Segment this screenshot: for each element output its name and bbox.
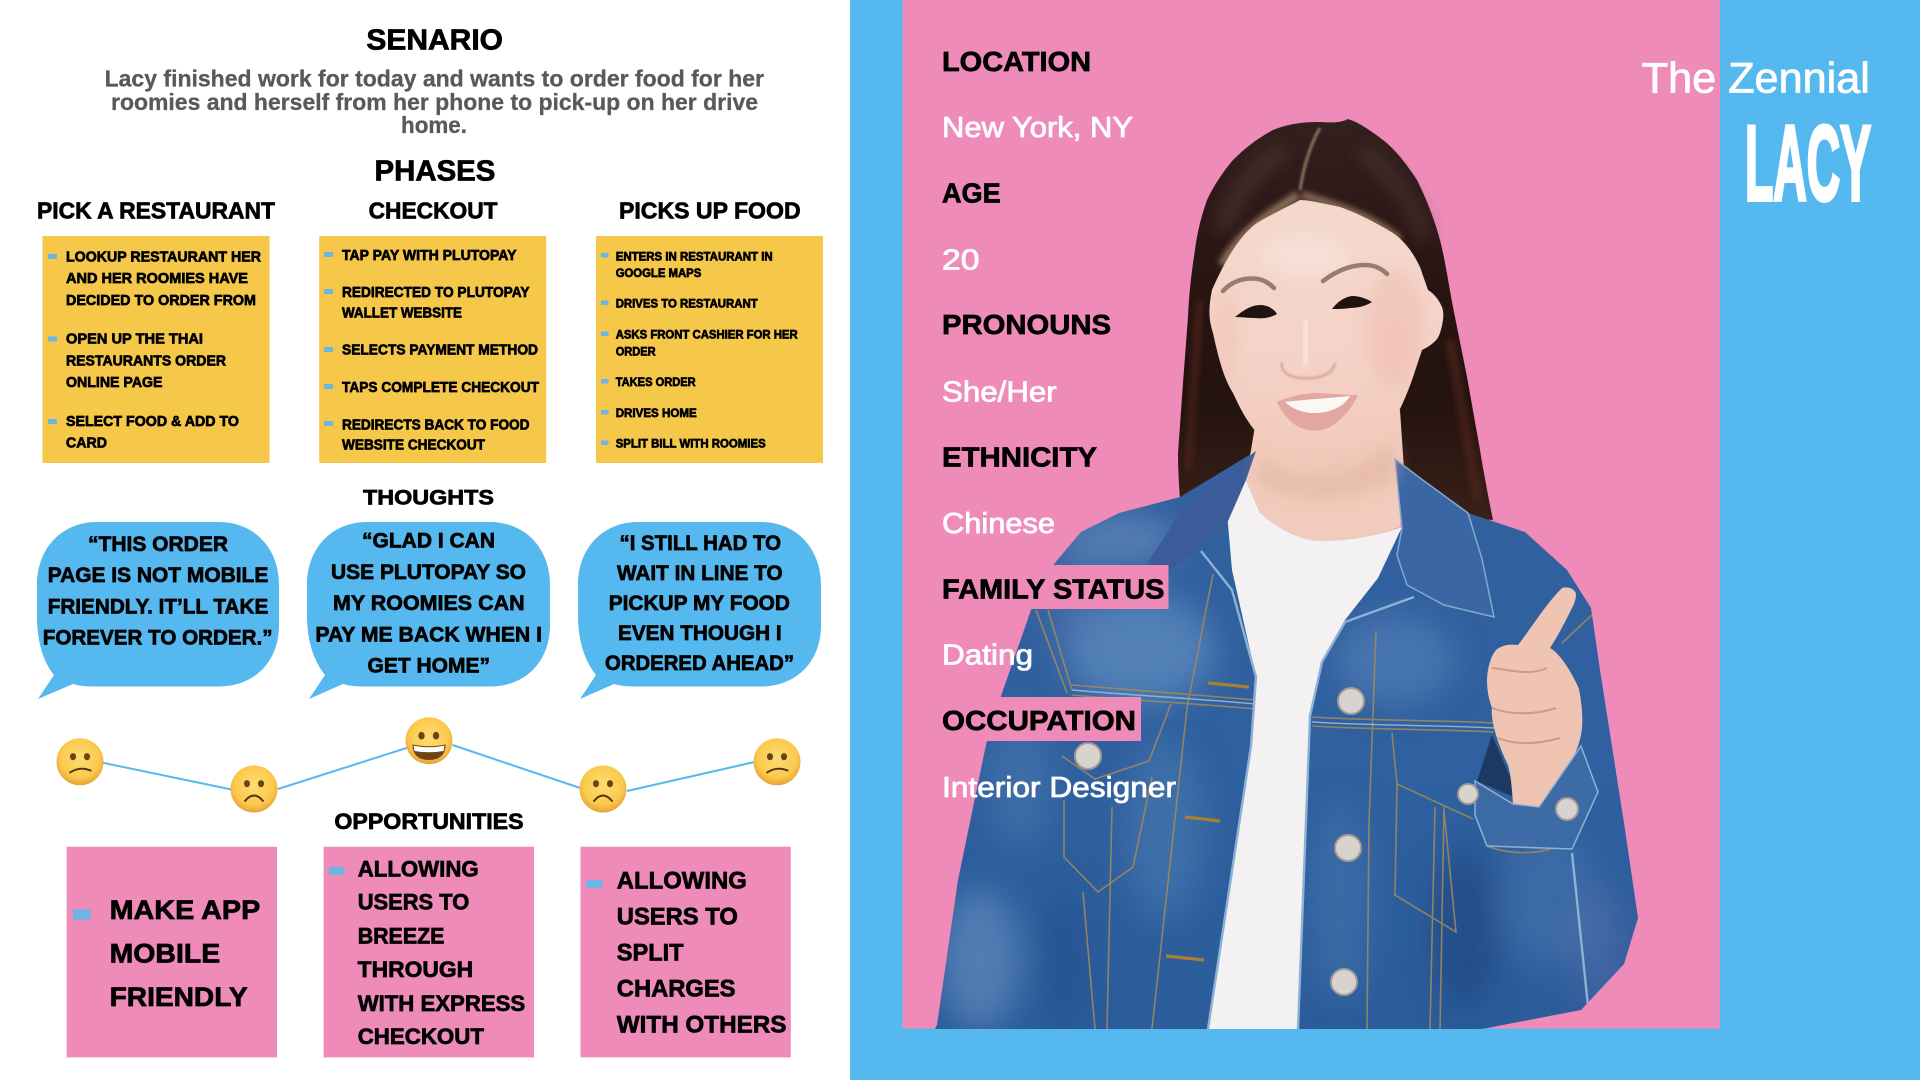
jacket body	[930, 440, 1650, 1040]
ethnicity value: Chinese	[942, 508, 1055, 540]
ethnicity label: ETHNICITY	[942, 441, 1097, 472]
pronouns label: PRONOUNS	[942, 309, 1111, 340]
panel: pick a restaurant steps: DECIDED TO ORDER FROM	[66, 292, 256, 309]
panel: checkout steps: TAP PAY WITH PLUTOPAY	[342, 248, 517, 264]
panel: opportunity 2: BREEZE	[358, 923, 444, 948]
scenario text	[105, 66, 764, 138]
panel: picks up food steps: ORDER	[616, 344, 656, 358]
icon: grinning face	[406, 717, 452, 764]
emotion journey line chart	[56, 717, 800, 812]
icon: confused face	[754, 738, 800, 785]
panel: opportunity 1: FRIENDLY	[110, 982, 248, 1012]
panel: opportunity 3: WITH OTHERS	[617, 1011, 786, 1038]
panel: opportunity 3: SPLIT	[617, 939, 684, 966]
pronouns value: She/Her	[942, 376, 1057, 408]
photo: woman in denim jacket giving thumbs up	[930, 119, 1650, 1040]
buttons	[1075, 688, 1578, 995]
panel: picks up food steps: ASKS FRONT CASHIER FOR HER	[616, 328, 798, 342]
icon: frowning face	[230, 766, 278, 812]
highlight: occupation	[942, 697, 1141, 741]
icon: frowning face	[580, 766, 626, 812]
family status value: Dating	[942, 639, 1033, 671]
panel: checkout steps: WALLET WEBSITE	[342, 306, 462, 322]
panel: opportunity 2	[324, 847, 534, 1057]
panel: opportunity 2: THROUGH	[358, 957, 473, 982]
scenario text: home.	[401, 112, 467, 138]
panel: opportunity 3: ALLOWING	[617, 867, 747, 894]
speech bubble 3: PICKUP MY FOOD	[609, 592, 790, 615]
face	[1209, 200, 1443, 498]
phase heading: checkout: CHECKOUT	[369, 197, 498, 223]
panel: picks up food steps: GOOGLE MAPS	[616, 266, 701, 280]
phases heading: PHASES	[374, 155, 495, 187]
panel: pick a restaurant steps: ONLINE PAGE	[66, 374, 162, 391]
speech bubble 2: PAY ME BACK WHEN I	[315, 622, 542, 646]
lips	[1277, 393, 1358, 431]
panel: picks up food steps: DRIVES HOME	[616, 406, 697, 420]
teeth	[1285, 396, 1350, 413]
panel: checkout steps: REDIRECTED TO PLUTOPAY	[342, 285, 530, 301]
speech bubble 3: “I STILL HAD TO	[620, 532, 781, 555]
left collar	[1147, 451, 1256, 572]
right panel: blue background	[850, 0, 1920, 1080]
panel: pick a restaurant steps: OPEN UP THE THAI	[66, 331, 203, 348]
location label: LOCATION	[942, 46, 1091, 77]
age value: 20	[942, 244, 980, 276]
panel: pick a restaurant steps: LOOKUP RESTAURANT HER	[66, 249, 261, 266]
jacket button loops	[1166, 683, 1249, 960]
panel: picks up food steps	[596, 236, 823, 463]
scenario heading: SENARIO	[366, 24, 503, 56]
panel: opportunity 2: ALLOWING	[358, 856, 479, 881]
speech bubble 1: FRIENDLY. IT’LL TAKE	[48, 594, 268, 618]
occupation value: Interior Designer	[942, 772, 1176, 804]
panel: picks up food steps: ENTERS IN RESTAURANT IN	[616, 249, 773, 263]
speech bubble 1: PAGE IS NOT MOBILE	[48, 563, 268, 587]
scenario text: Lacy finished work for today and wants to order food for her	[105, 66, 764, 92]
location value: New York, NY	[942, 112, 1133, 144]
persona type: The Zennial	[1642, 54, 1870, 102]
panel: checkout steps	[319, 236, 546, 463]
t-shirt	[1208, 480, 1402, 1029]
jacket stitching and seams	[1036, 574, 1595, 1029]
phase heading: pick a restaurant: PICK A RESTAURANT	[37, 197, 275, 223]
cuff inner shadow	[1477, 735, 1520, 800]
age label: AGE	[942, 177, 1001, 208]
panel: checkout steps: SELECTS PAYMENT METHOD	[342, 343, 538, 359]
scenario text: roomies and herself from her phone to pick-up on her drive	[111, 89, 758, 115]
speech bubble 2: USE PLUTOPAY SO	[331, 560, 526, 584]
persona details	[942, 46, 1176, 804]
eyes	[1235, 305, 1277, 318]
panel: opportunity 1: MOBILE	[110, 938, 220, 968]
panel: opportunity 2: USERS TO	[358, 890, 469, 915]
right panel: pink backdrop	[902, 0, 1720, 1028]
icon: confused face	[56, 738, 104, 785]
panel: opportunity 3: CHARGES	[617, 975, 736, 1002]
panel: opportunity 1: MAKE APP	[110, 895, 260, 925]
highlight: family status	[942, 565, 1168, 609]
nose	[1282, 320, 1335, 378]
eyebrows	[1223, 278, 1274, 291]
left panel background	[0, 0, 850, 1080]
panel: picks up food steps: TAKES ORDER	[616, 375, 696, 389]
occupation label: OCCUPATION	[942, 705, 1136, 736]
hand with thumb up	[1487, 587, 1582, 807]
right collar	[1395, 459, 1494, 617]
family status label: FAMILY STATUS	[942, 573, 1164, 604]
opportunities heading: OPPORTUNITIES	[334, 809, 524, 834]
speech bubble 3: WAIT IN LINE TO	[617, 562, 783, 585]
panel: opportunity 1	[67, 847, 277, 1057]
neck	[1246, 410, 1404, 541]
speech bubble 1: FOREVER TO ORDER.”	[43, 625, 273, 649]
speech bubble 3: EVEN THOUGH I	[618, 622, 782, 645]
speech bubble 1	[37, 522, 279, 699]
phase heading: picks up food: PICKS UP FOOD	[619, 197, 801, 223]
speech bubble 3	[578, 522, 821, 699]
panel: pick a restaurant steps: RESTAURANTS ORDER	[66, 352, 226, 369]
panel: pick a restaurant steps: AND HER ROOMIES HAVE	[66, 270, 248, 287]
speech bubble 2: “GLAD I CAN	[362, 529, 495, 553]
panel: checkout steps: TAPS COMPLETE CHECKOUT	[342, 380, 539, 396]
speech bubble 2	[307, 522, 550, 699]
panel: opportunity 2: WITH EXPRESS	[358, 991, 525, 1016]
panel: checkout steps: REDIRECTS BACK TO FOOD	[342, 417, 530, 433]
chin shadow on neck	[1256, 440, 1398, 498]
panel: picks up food steps: DRIVES TO RESTAURANT	[616, 297, 758, 311]
panel: opportunity 3: USERS TO	[617, 903, 738, 930]
thoughts heading: THOUGHTS	[363, 487, 494, 510]
panel: opportunity 2: CHECKOUT	[358, 1024, 484, 1049]
speech bubble 3: ORDERED AHEAD”	[605, 652, 794, 675]
speech bubble 2: GET HOME”	[368, 653, 490, 677]
panel: opportunity 3	[580, 847, 791, 1057]
denim fading	[940, 515, 1625, 1030]
hair	[1178, 119, 1493, 520]
panel: pick a restaurant steps: CARD	[66, 435, 107, 452]
jacket light placket edges	[1201, 551, 1414, 1029]
speech bubble 1: “THIS ORDER	[88, 532, 228, 556]
panel: pick a restaurant steps	[42, 236, 270, 463]
panel: picks up food steps: SPLIT BILL WITH ROOMIES	[616, 437, 766, 451]
panel: checkout steps: WEBSITE CHECKOUT	[342, 438, 485, 454]
cuff	[1475, 746, 1598, 849]
speech bubble 2: MY ROOMIES CAN	[333, 591, 525, 615]
panel: pick a restaurant steps: SELECT FOOD & ADD TO	[66, 413, 239, 430]
